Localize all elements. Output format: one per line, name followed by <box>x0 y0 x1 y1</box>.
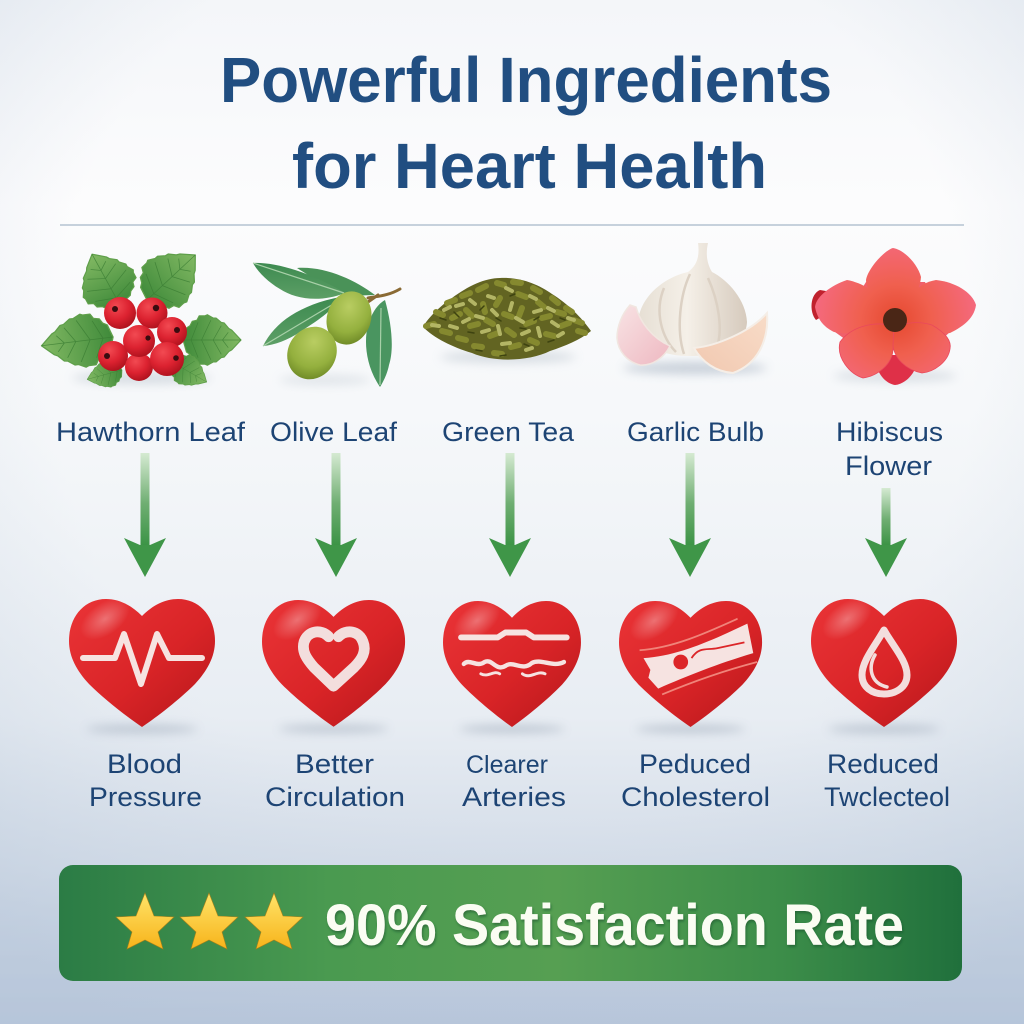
label: Olive Leaf: Olive Leaf <box>270 417 398 447</box>
label: Garlic Bulb: Garlic Bulb <box>627 417 764 447</box>
label: Green Tea: Green Tea <box>442 417 575 447</box>
title: Powerful Ingredients <box>220 44 832 116</box>
heart icon: reduced triglycerides droplet <box>811 590 957 733</box>
heart icon: clearer arteries <box>443 592 581 733</box>
icon: hawthorn leaf and berries <box>38 234 241 396</box>
banner text: 90% Satisfaction Rate <box>325 893 904 958</box>
label: Hibiscus Flower <box>836 417 943 481</box>
benefit label: Reduced Twclecteol: Reduced <box>827 749 939 779</box>
icon: hibiscus flower <box>811 248 976 385</box>
arrow 5 <box>865 488 907 577</box>
benefit label: Clearer Arteries: Arteries <box>462 782 566 812</box>
icon: garlic bulb <box>617 243 767 374</box>
benefit label: Better Circulation: Circulation <box>265 782 405 812</box>
arrow 3 <box>489 453 531 577</box>
benefit label: Blood Pressure: Blood <box>107 749 182 779</box>
heart icon: blood pressure <box>69 590 215 733</box>
title <box>220 44 832 202</box>
icon: olive leaf and olives <box>253 263 400 388</box>
icon: green tea pile <box>423 278 591 363</box>
benefit label: Blood Pressure <box>89 749 202 812</box>
label: Hibiscus Flower: Flower <box>845 451 932 481</box>
arrow 1 <box>124 453 166 577</box>
heart icon: reduced cholesterol <box>619 592 762 733</box>
benefit label: Reduced Twclecteol <box>824 749 950 812</box>
benefit label: Peduced Cholesterol: Cholesterol <box>621 782 770 812</box>
benefit label: Clearer Arteries: Clearer <box>466 751 548 779</box>
benefit label: Peduced Cholesterol <box>621 749 770 812</box>
arrow 2 <box>315 453 357 577</box>
heart icon: circulation <box>262 591 405 733</box>
label: Hibiscus Flower: Hibiscus <box>836 417 943 447</box>
label: Hawthorn Leaf: Hawthorn Leaf <box>56 417 246 447</box>
benefit label: Clearer Arteries <box>462 751 566 812</box>
benefit label: Peduced Cholesterol: Peduced <box>639 749 751 779</box>
stars <box>116 893 303 949</box>
benefit label: Better Circulation <box>265 749 405 812</box>
benefit label: Blood Pressure: Pressure <box>89 782 202 812</box>
banner: satisfaction rate <box>59 865 962 981</box>
benefit label: Reduced Twclecteol: Twclecteol <box>824 782 950 812</box>
arrow 4 <box>669 453 711 577</box>
title: for Heart Health <box>292 130 767 202</box>
benefit label: Better Circulation: Better <box>295 749 374 779</box>
